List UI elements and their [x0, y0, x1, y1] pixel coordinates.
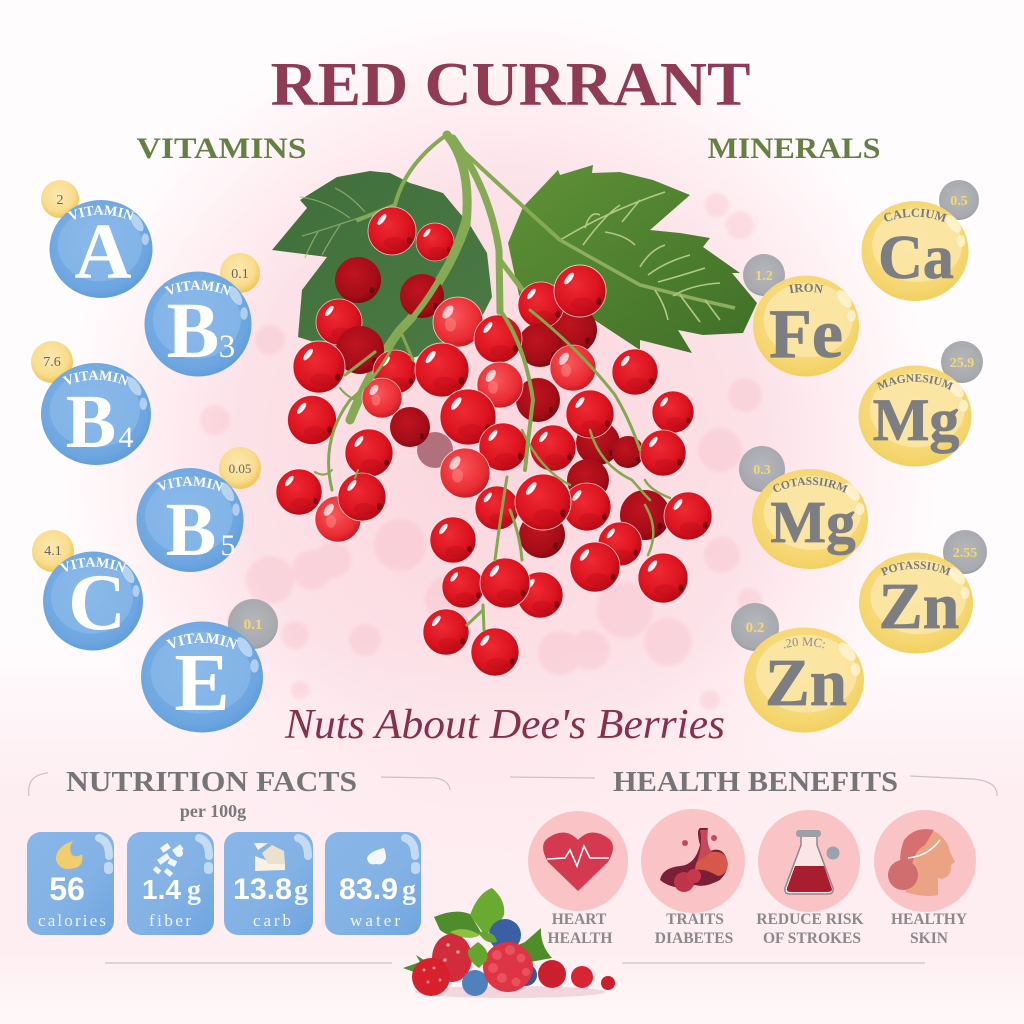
nutrition card: water: g — [402, 875, 416, 906]
mineral bubble: potassium Zn: POTASSIUM — [880, 561, 952, 576]
vitamin bubble: B4 — [31, 341, 151, 465]
benefit: healthy skin — [874, 810, 976, 947]
vitamin bubble: C: VITAMIN — [60, 557, 126, 572]
amount badge: 0.1 — [231, 267, 249, 282]
illustration: red currant cluster — [272, 135, 757, 676]
vitamin bubble: B4: 4 — [118, 421, 134, 454]
benefit: heart health: HEART — [552, 911, 607, 928]
nutrition card: calories: calories — [38, 911, 106, 930]
mineral bubble: magnesium: Mg — [873, 387, 959, 453]
title: RED CURRANT — [270, 51, 750, 119]
nutrition card: carb: g — [294, 875, 308, 906]
nutrition card: fiber — [127, 832, 214, 935]
vitamin bubble: C: C — [68, 559, 126, 647]
vitamin bubble: B5 — [136, 447, 261, 572]
vitamin bubble: B3 — [144, 253, 260, 376]
icon: organ — [641, 809, 745, 913]
heading: minerals: MINERALS — [708, 132, 880, 165]
vitamin bubble: C — [32, 530, 143, 650]
icon: heart — [528, 811, 628, 911]
amount badge: 1.2 — [755, 269, 773, 284]
vitamin bubble: B4: B — [66, 380, 116, 464]
mineral bubble: zinc: Zn — [765, 646, 847, 720]
mineral bubble: zinc — [731, 603, 864, 732]
amount badge: 2 — [56, 193, 64, 208]
amount badge: 2.55 — [953, 546, 977, 561]
nutrition card: fiber: g — [187, 875, 201, 906]
mineral bubble: zinc: .20 MC: — [784, 638, 825, 648]
nutrition card: carb: 13.8 — [233, 873, 292, 906]
nutrition card: water: water — [350, 911, 400, 930]
benefit: heart health: HEALTH — [548, 930, 612, 947]
mineral bubble: potassium Mg: COTASSIIRM — [773, 477, 848, 493]
berries: back layer — [316, 207, 670, 558]
vitamin bubble: B4: VITAMIN — [62, 370, 130, 386]
vitamin bubble: E — [141, 599, 278, 732]
vitamin bubble: B3: B — [167, 288, 219, 375]
vitamin bubble: A: A — [74, 209, 132, 296]
stems: back — [350, 135, 560, 420]
heading: nutrition facts: NUTRITION FACTS — [66, 766, 357, 798]
vitamin bubble: E: VITAMIN — [166, 632, 238, 650]
nutrition card: fiber: 1.4 — [142, 874, 181, 905]
vitamin bubble: B3: VITAMIN — [164, 280, 232, 296]
benefit: reduce risk of strokes: OF STROKES — [763, 930, 861, 947]
mineral bubble: potassium Mg — [739, 446, 868, 569]
amount badge: 7.6 — [43, 355, 61, 370]
vitamin bubble: E: E — [174, 636, 230, 728]
nutrition card: carb: carb — [253, 911, 291, 930]
leaf: left — [272, 171, 492, 365]
berries — [412, 934, 615, 996]
benefit: reduce risk of strokes: REDUCE RISK — [756, 911, 864, 928]
amount badge: 0.5 — [950, 194, 968, 209]
back leaves — [403, 888, 552, 975]
vitamin bubble: A — [41, 180, 152, 298]
amount badge: 0.2 — [746, 620, 764, 636]
vitamin bubble: A: VITAMIN — [68, 205, 134, 220]
mineral bubble: iron — [743, 254, 859, 376]
stems: front — [315, 310, 670, 630]
nutrition card: fiber: fiber — [149, 911, 191, 930]
vitamin bubble: B3: 3 — [219, 329, 235, 365]
nutrition card: water: 83.9 — [339, 873, 398, 906]
vitamin bubble: B5: B — [166, 488, 216, 572]
vitamin bubble: B5: VITAMIN — [156, 476, 224, 492]
mineral bubble: potassium Zn: Zn — [879, 570, 959, 643]
berries: front layer — [276, 265, 712, 676]
mineral bubble: calcium: CALCIUM — [884, 208, 947, 222]
icon: flame — [56, 841, 82, 869]
mineral bubble: iron: IRON — [788, 284, 824, 294]
icon: fiber — [153, 843, 184, 877]
amount badge: 25.9 — [950, 356, 974, 371]
brand line: Nuts About Dee's Berries — [284, 702, 725, 748]
benefit: healthy skin: HEALTHY — [891, 911, 967, 928]
mineral bubble: calcium — [862, 180, 979, 301]
amount badge: 0.3 — [753, 463, 771, 478]
amount badge: 0.05 — [229, 461, 251, 476]
benefit: heart health — [528, 811, 628, 947]
section rules — [29, 773, 997, 963]
benefit: reduce risk of strokes — [756, 810, 864, 947]
benefit: traits diabetes: DIABETES — [655, 930, 733, 947]
benefit: traits diabetes — [641, 809, 745, 947]
nutrition card: carb — [224, 832, 313, 935]
mineral bubble: iron: Fe — [769, 296, 843, 373]
mineral bubble: potassium Mg: Mg — [770, 489, 856, 555]
illustration: mixed berries — [403, 888, 615, 998]
leaf: right — [508, 165, 757, 353]
icon: head profile — [874, 810, 976, 912]
nutrition card: water — [325, 832, 421, 935]
heading: health benefits: HEALTH BENEFITS — [613, 766, 898, 798]
icon: flask — [758, 810, 860, 912]
front leaves — [450, 929, 497, 968]
mineral bubble: magnesium — [858, 341, 983, 466]
vitamin bubble: B5: 5 — [220, 529, 236, 562]
nutrition card: calories — [27, 832, 114, 935]
stem over top berries — [402, 215, 466, 330]
mineral bubble: magnesium: MAGNESIUM — [876, 374, 954, 390]
heading: vitamins: VITAMINS — [136, 132, 306, 165]
icon: water drop — [367, 848, 386, 864]
mineral bubble: calcium: Ca — [878, 224, 954, 292]
icon: carb block — [254, 843, 285, 871]
mineral bubble: potassium Zn — [859, 530, 987, 654]
benefit: healthy skin: SKIN — [910, 930, 948, 947]
amount badge: 4.1 — [44, 544, 62, 559]
text: per 100g: per 100g — [180, 801, 246, 821]
nutrition card: calories: 56 — [49, 871, 85, 907]
blueberry — [489, 919, 521, 951]
benefit: traits diabetes: TRAITS — [666, 911, 724, 928]
amount badge: 0.1 — [244, 617, 262, 633]
